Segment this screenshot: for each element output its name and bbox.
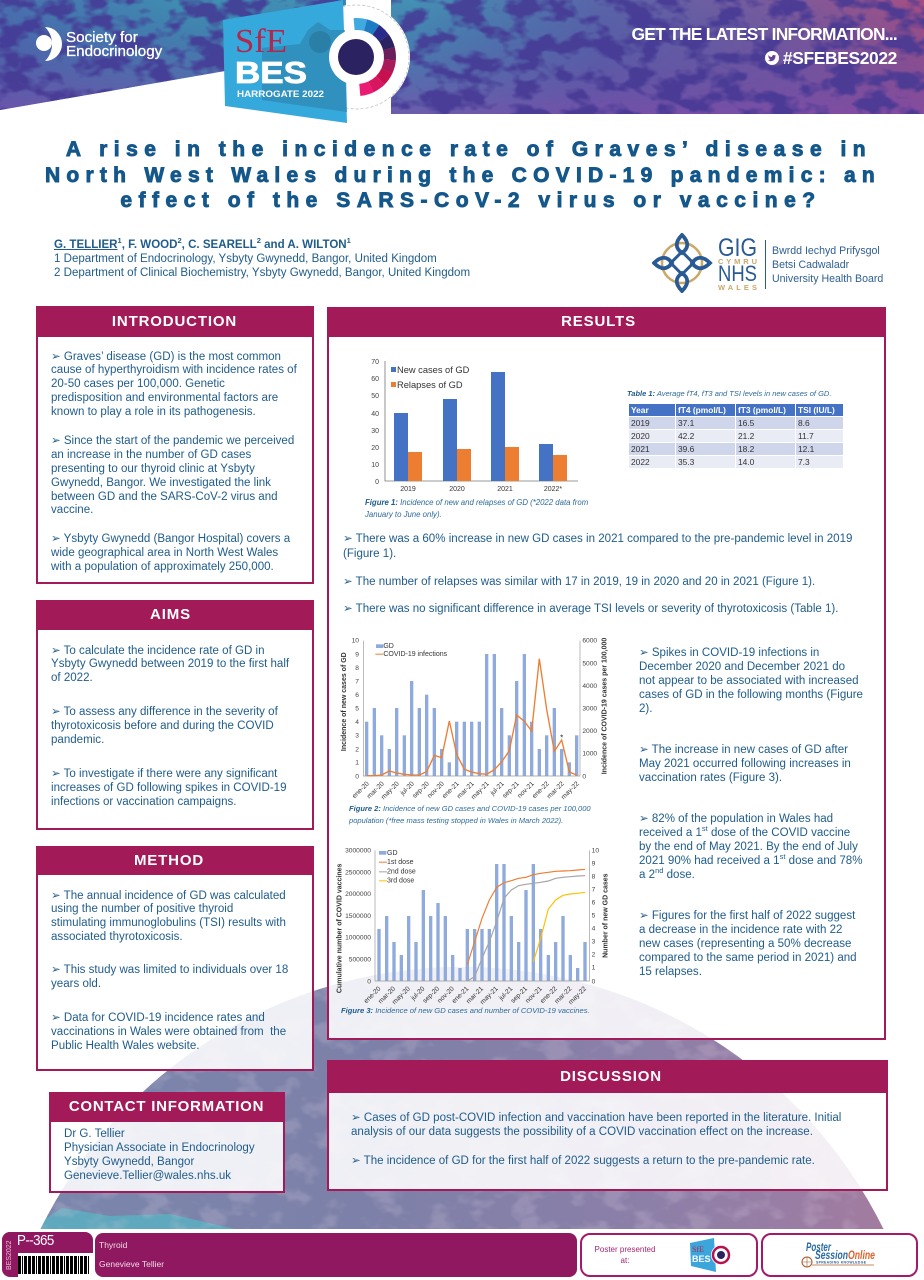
chart: figure 2 GD and COVID-19 infections: jul-20	[399, 780, 416, 798]
text: introduction bullets: presenting to our thyroid clinic at Ysbyty	[51, 463, 255, 475]
footer: topic and author: Thyroid	[99, 1240, 127, 1250]
table 1: 35.3	[678, 457, 694, 467]
text: aim 1: ➢ To calculate the incidence rate of GD in	[51, 642, 265, 656]
heading: contact information	[48, 1092, 284, 1122]
title: A rise in the incidence rate of Graves’ disease in	[66, 138, 872, 161]
text: results commentary on figures: 2021 90% had received a 1st dose and 78%	[639, 852, 862, 867]
logo: GIG Cymru NHS Wales, Betsi Cadwaladr: CYMRU	[718, 257, 757, 266]
chart: figure 2 GD and COVID-19 infections: 2000	[582, 728, 597, 735]
footer: Poster Session Online logo: Poster	[806, 1240, 832, 1254]
text: method 2	[51, 962, 288, 990]
table 1	[629, 404, 843, 468]
text: discussion bullets: analysis of our data suggests the possibility of a COVID vaccination effect on the increase.	[351, 1126, 813, 1138]
text: aim 3: infections or vaccination campaigns.	[51, 796, 236, 808]
text: introduction bullets: cause of hyperthyroidism with incidence rates of	[51, 364, 297, 376]
chart: figure 2 GD and COVID-19 infections: mar-21	[456, 780, 476, 800]
text: results findings: ➢ There was a 60% increase in new GD cases in 2021 compared to the pre-pandemic level in 2019	[343, 531, 852, 545]
text: introduction bullets: wide geographical area in North West Wales	[51, 547, 278, 559]
text: introduction bullets: ➢ Since the start of the pandemic we perceived	[51, 433, 294, 447]
text: results commentary on figures: December 2020 and December 2021 do	[639, 661, 845, 673]
panel: method	[36, 846, 314, 1071]
chart: figure 3 GD and vaccine doses: 10	[592, 847, 599, 854]
footer: topic and author	[95, 1233, 577, 1277]
text: aim 3: ➢ To investigate if there were any significant	[51, 766, 277, 780]
logo: GIG Cymru NHS Wales, Betsi Cadwaladr: NHS	[718, 261, 757, 286]
table 1: 14.0	[738, 457, 754, 467]
text: aim 1: Ysbyty Gwynedd between 2019 to the first half	[51, 658, 289, 670]
panel: aims	[36, 600, 314, 830]
text: introduction bullets: between GD and the SARS-CoV-2 virus and	[51, 491, 278, 503]
text: results findings	[343, 531, 852, 615]
chart: figure 3 GD and vaccine doses: 3000000	[345, 847, 371, 854]
chart: figure 2 GD and COVID-19 infections: 10	[352, 638, 359, 645]
chart: figure 3 GD and vaccine doses: 1500000	[345, 913, 371, 920]
text: introduction bullets: an increase in the number of GD cases	[51, 449, 251, 461]
text: method 2: ➢ This study was limited to individuals over 18	[51, 962, 288, 976]
chart: figure 3 GD and vaccine doses: mar-20	[377, 985, 397, 1005]
table 1: 2021	[631, 444, 650, 454]
logo: GIG Cymru NHS Wales, Betsi Cadwaladr: University Health Board	[772, 273, 883, 285]
chart: figure 3 GD and vaccine doses: 1000000	[345, 935, 371, 942]
table 1: 37.1	[678, 418, 694, 428]
text: aim 2: pandemic.	[51, 734, 104, 746]
table 1: 12.1	[798, 444, 814, 454]
chart: figure 3 GD and vaccine doses: 5	[592, 912, 596, 919]
chart: figure 1 bar chart: 50	[371, 393, 379, 400]
footer: poster number and barcode: P--365	[17, 1233, 54, 1249]
table 1: 8.6	[798, 418, 810, 428]
caption: figure 2	[348, 804, 591, 824]
caption: figure 1	[365, 498, 588, 518]
table 1: 39.6	[678, 444, 694, 454]
heading: results: RESULTS	[561, 312, 636, 330]
text: introduction bullets	[51, 348, 297, 573]
chart: figure 3 GD and vaccine doses: sep-20	[422, 985, 441, 1005]
text: introduction bullets: with a population of approximately 250,000.	[51, 561, 274, 573]
authors and affiliations: G. TELLIER1, F. WOOD2, C. SEARELL2 and A. WILTON1	[54, 236, 351, 251]
text: contact details: Physician Associate in Endocrinology	[64, 1142, 255, 1154]
logo: GIG Cymru NHS Wales, Betsi Cadwaladr	[652, 233, 883, 293]
chart: figure 1 bar chart: 10	[371, 462, 379, 469]
chart: figure 2 GD and COVID-19 infections: ene-21	[441, 780, 461, 800]
title: North West Wales during the COVID-19 pandemic: an	[45, 164, 881, 187]
text: aim 3: increases of GD following spikes in COVID-19	[51, 782, 287, 794]
table 1: 7.3	[798, 457, 810, 467]
text: results commentary on figures: ➢ The increase in new cases of GD after	[639, 742, 848, 756]
chart: figure 3 GD and vaccine doses: 2	[592, 951, 596, 958]
text: method 3: Public Health Wales website.	[51, 1040, 199, 1052]
header call to action	[632, 24, 897, 68]
table 1: TSI (IU/L)	[798, 405, 835, 415]
text: method 2: years old.	[51, 978, 101, 990]
heading: results	[326, 306, 886, 336]
authors and affiliations	[54, 236, 470, 279]
chart: figure 3 GD and vaccine doses: nov-20	[436, 985, 456, 1005]
chart: figure 2 GD and COVID-19 infections: 1	[355, 760, 359, 767]
text: method 3	[51, 1010, 286, 1052]
chart: figure 2 GD and COVID-19 infections: GD	[383, 643, 394, 650]
chart: figure 2 GD and COVID-19 infections: ene-22	[531, 780, 551, 800]
heading: introduction	[36, 306, 314, 336]
footer: poster presented at	[580, 1233, 758, 1277]
chart: figure 3 GD and vaccine doses: 8	[592, 873, 596, 880]
footer: topic and author: Genevieve Tellier	[99, 1259, 164, 1269]
text: aim 1	[51, 642, 290, 684]
caption: figure 1: January to June only).	[365, 510, 442, 518]
logo: Society for Endocrinology: Society for	[66, 29, 138, 46]
chart: figure 3 GD and vaccine doses: 3	[592, 938, 596, 945]
chart: figure 3 GD and vaccine doses: 9	[592, 860, 596, 867]
footer: Poster Session Online logo	[761, 1233, 918, 1277]
text: results commentary on figures: by the end of May 2021. By the end of July	[639, 841, 858, 853]
heading: aims	[36, 600, 314, 630]
heading: method: METHOD	[134, 852, 204, 868]
chart: figure 2 GD and COVID-19 infections: Incidence of COVID-19 cases per 100,000	[601, 638, 608, 774]
chart: figure 2 GD and COVID-19 infections: 7	[355, 678, 359, 685]
chart: figure 1 bar chart: 30	[371, 428, 379, 435]
chart: figure 2 GD and COVID-19 infections: mar-22	[546, 780, 566, 800]
chart: figure 3 GD and vaccine doses: ene-20	[363, 985, 383, 1005]
authors and affiliations: 2 Department of Clinical Biochemistry, Ysbyty Gwynedd, Bangor, United Kingdom	[54, 267, 470, 279]
text: discussion bullets	[351, 1110, 841, 1167]
footer: Poster Session Online logo: Session	[815, 1248, 848, 1262]
text: results commentary on figures: ➢ 82% of the population in Wales had	[639, 811, 833, 825]
chart: figure 3 GD and vaccine doses: ene-21	[451, 985, 471, 1005]
table 1: Year	[631, 405, 649, 415]
text: introduction bullets: known to play a role in its pathogenesis.	[51, 406, 256, 418]
chart: figure 3 GD and vaccine doses: GD	[387, 850, 398, 857]
text: aim 3	[51, 766, 287, 808]
chart: figure 3 GD and vaccine doses: mar-22	[554, 985, 574, 1005]
chart: figure 3 GD and vaccine doses: ene-22	[539, 985, 559, 1005]
table 1: 2020	[631, 431, 650, 441]
chart: figure 2 GD and COVID-19 infections: 8	[355, 665, 359, 672]
text: method 1: ➢ The annual incidence of GD was calculated	[51, 888, 286, 902]
panel: discussion	[327, 1060, 888, 1191]
text: introduction bullets: ➢ Ysbyty Gwynedd (Bangor Hospital) covers a	[51, 531, 290, 545]
title: effect of the SARS-CoV-2 virus or vaccine?	[120, 189, 822, 212]
logo: Society for Endocrinology	[36, 27, 162, 61]
text: contact details	[64, 1128, 255, 1182]
chart: figure 2 GD and COVID-19 infections: Incidence of new cases of GD	[341, 652, 348, 751]
footer: poster number and barcode	[2, 1232, 93, 1277]
text: aim 2: ➢ To assess any difference in the severity of	[51, 704, 278, 718]
chart: figure 3 GD and vaccine doses: 2500000	[345, 869, 371, 876]
chart: figure 2 GD and COVID-19 infections: *	[560, 734, 563, 743]
chart: figure 1 bar chart: 60	[371, 376, 379, 383]
header call to action: GET THE LATEST INFORMATION...	[632, 24, 897, 44]
chart: figure 2 GD and COVID-19 infections: jul-21	[489, 780, 506, 798]
chart: figure 2 GD and COVID-19 infections: 5	[355, 706, 359, 713]
text: method 1: associated thyrotoxicosis.	[51, 931, 183, 943]
chart: figure 1 bar chart: New cases of GD	[397, 365, 470, 375]
chart: figure 1 bar chart: 2021	[497, 486, 513, 493]
header call to action: #SFEBES2022	[783, 48, 897, 68]
text: discussion bullets: ➢ Cases of GD post-COVID infection and vaccination have been reported in the literature. Initial	[351, 1110, 841, 1124]
text: aim 1: of 2022.	[51, 672, 93, 684]
text: results commentary on figures: vaccination rates (Figure 3).	[639, 772, 782, 784]
text: results commentary on figures	[639, 645, 863, 978]
text: results commentary on figures: ➢ Spikes in COVID-19 infections in	[639, 645, 819, 659]
text: aim 2	[51, 704, 278, 746]
text: method 3: ➢ Data for COVID-19 incidence rates and	[51, 1010, 265, 1024]
chart: figure 2 GD and COVID-19 infections: 9	[355, 651, 359, 658]
logo: GIG Cymru NHS Wales, Betsi Cadwaladr: Bwrdd Iechyd Prifysgol	[772, 245, 880, 257]
caption: figure 2: population (*free mass testing stopped in Wales in March 2022).	[349, 816, 563, 824]
chart: figure 2 GD and COVID-19 infections: 3	[355, 733, 359, 740]
chart: figure 3 GD and vaccine doses: 4	[592, 925, 596, 932]
chart: figure 1 bar chart: 2022*	[544, 486, 562, 493]
authors and affiliations: 1 Department of Endocrinology, Ysbyty Gwynedd, Bangor, United Kingdom	[54, 253, 437, 265]
chart: figure 3 GD and vaccine doses: mar-21	[465, 985, 485, 1005]
logo: SfE BES Harrogate 2022: BES	[235, 55, 307, 90]
text: introduction bullets: 20-50 cases per 100,000. Genetic	[51, 378, 225, 390]
chart: figure 2 GD and COVID-19 infections: 1000	[582, 751, 597, 758]
chart: figure 3 GD and vaccine doses: Cumulative number of COVID vaccines	[337, 863, 344, 993]
chart: figure 3 GD and vaccine doses: 0	[367, 978, 371, 985]
table 1: fT3 (pmol/L)	[738, 405, 786, 415]
chart: figure 2 GD and COVID-19 infections: mar-20	[366, 780, 386, 800]
chart: figure 3 GD and vaccine doses: Number of new GD cases	[603, 873, 610, 958]
caption: figure 2: Figure 2: Incidence of new GD cases and COVID-19 cases per 100,000	[349, 804, 591, 813]
panel: contact information	[49, 1092, 285, 1193]
chart: figure 2 GD and COVID-19 infections	[340, 638, 608, 800]
table 1: 18.2	[738, 444, 754, 454]
footer: poster presented at: SfE	[692, 1245, 704, 1254]
logo: SfE BES Harrogate 2022	[223, 0, 410, 123]
footer: poster number and barcode: BES2022	[6, 1240, 13, 1270]
logo: SfE BES Harrogate 2022: HARROGATE 2022	[237, 89, 324, 100]
panel: results	[327, 307, 886, 1040]
text: method 1: using the number of positive thyroid	[51, 903, 233, 915]
text: introduction bullets: predisposition and environmental factors are	[51, 392, 278, 404]
chart: figure 3 GD and vaccine doses: 2000000	[345, 891, 371, 898]
logo: GIG Cymru NHS Wales, Betsi Cadwaladr: WALES	[718, 283, 757, 292]
footer: Poster Session Online logo: SPREADING KNOWLEDGE	[816, 1260, 867, 1264]
chart: figure 3 GD and vaccine doses: 1st dose	[387, 859, 414, 866]
logo: Society for Endocrinology: Endocrinology	[66, 42, 162, 60]
chart: figure 2 GD and COVID-19 infections: nov-20	[426, 780, 446, 800]
chart: figure 3 GD and vaccine doses: jul-21	[497, 985, 515, 1003]
logo: SfE BES Harrogate 2022: SfE	[235, 23, 287, 60]
text: results commentary on figures: received a 1st dose of the COVID vaccine	[639, 824, 850, 839]
text: results commentary on figures: ➢ Figures for the first half of 2022 suggest	[639, 908, 855, 922]
logo: GIG Cymru NHS Wales, Betsi Cadwaladr: Betsi Cadwaladr	[772, 259, 850, 271]
text: introduction bullets: vaccine.	[51, 504, 93, 516]
chart: figure 3 GD and vaccine doses: 7	[592, 886, 596, 893]
text: contact details: Genevieve.Tellier@wales.nhs.uk	[64, 1170, 231, 1182]
chart: figure 2 GD and COVID-19 infections: 4	[355, 719, 359, 726]
chart: figure 3 GD and vaccine doses: 2nd dose	[387, 869, 416, 876]
text: method 1	[51, 888, 286, 943]
chart: figure 1 bar chart: 0	[375, 479, 379, 486]
logo: GIG Cymru NHS Wales, Betsi Cadwaladr: GIG	[718, 234, 757, 262]
text: results commentary on figures: new cases (representing a 50% decrease	[639, 938, 851, 950]
chart: figure 2 GD and COVID-19 infections: COVID-19 infections	[383, 651, 448, 658]
text: contact details: Ysbyty Gwynedd, Bangor	[64, 1156, 194, 1168]
chart: figure 3 GD and vaccine doses: 1	[592, 964, 596, 971]
chart: figure 2 GD and COVID-19 infections: sep-21	[501, 780, 521, 800]
table 1: 2019	[631, 418, 650, 428]
chart: figure 1 bar chart: 2020	[449, 486, 465, 493]
heading: discussion: DISCUSSION	[560, 1068, 662, 1084]
caption: table 1: Table 1: Average fT4, fT3 and TSI levels in new cases of GD.	[627, 389, 831, 398]
chart: figure 2 GD and COVID-19 infections: 4000	[582, 683, 597, 690]
footer: poster presented at: at:	[621, 1256, 629, 1265]
heading: contact information: CONTACT INFORMATION	[69, 1098, 264, 1114]
chart: figure 1 bar chart: 2019	[400, 486, 416, 493]
chart: figure 3 GD and vaccine doses	[336, 847, 610, 1005]
text: contact details: Dr G. Tellier	[64, 1128, 125, 1140]
text: results commentary on figures: a 2nd dose.	[639, 866, 695, 881]
title	[45, 138, 881, 212]
chart: figure 2 GD and COVID-19 infections: 2	[355, 746, 359, 753]
chart: figure 2 GD and COVID-19 infections: 3000	[582, 705, 597, 712]
footer: Poster Session Online logo: Online	[848, 1248, 875, 1262]
text: results commentary on figures: 15 relapses.	[639, 966, 702, 978]
heading: introduction: INTRODUCTION	[112, 312, 237, 330]
text: introduction bullets: ➢ Graves’ disease (GD) is the most common	[51, 348, 281, 362]
text: results commentary on figures: compared to the same period in 2021) and	[639, 952, 857, 964]
caption: figure 3: Figure 3: Incidence of new GD cases and number of COVID-19 vaccines.	[341, 1006, 590, 1015]
text: results commentary on figures: a decrease in the incidence rate with 22	[639, 924, 842, 936]
text: method 3: vaccinations in Wales were obtained from the	[51, 1026, 286, 1038]
footer: poster presented at: Poster presented	[595, 1245, 655, 1254]
text: results commentary on figures: 2).	[639, 703, 652, 715]
chart: figure 1 bar chart: 70	[371, 359, 379, 366]
chart: figure 1 bar chart: 40	[371, 411, 379, 418]
text: results findings: (Figure 1).	[343, 548, 396, 560]
chart: figure 2 GD and COVID-19 infections: 0	[355, 773, 359, 780]
chart: figure 1 bar chart: Relapses of GD	[397, 380, 463, 390]
table 1: 11.7	[798, 431, 814, 441]
chart: figure 2 GD and COVID-19 infections: ene-20	[351, 780, 371, 800]
chart: figure 3 GD and vaccine doses: jul-20	[409, 985, 427, 1003]
chart: figure 2 GD and COVID-19 infections: 6	[355, 692, 359, 699]
text: introduction bullets: Gwynedd, Bangor. We investigated the link	[51, 477, 271, 489]
text: results commentary on figures: cases of GD in the following months (Figure	[639, 689, 863, 701]
table 1: 16.5	[738, 418, 754, 428]
heading: aims: AIMS	[150, 606, 191, 622]
heading: discussion	[326, 1060, 888, 1092]
text: method 1: stimulating immunoglobulins (TSI) results with	[51, 917, 286, 929]
text: aim 2: thyrotoxicosis before and during the COVID	[51, 720, 274, 732]
table 1: fT4 (pmol/L)	[678, 405, 726, 415]
text: discussion bullets: ➢ The incidence of GD for the first half of 2022 suggests a return to the pre-pandemic rate.	[351, 1153, 815, 1167]
table 1: 42.2	[678, 431, 694, 441]
chart: figure 3 GD and vaccine doses: 0	[592, 978, 596, 985]
panel: introduction	[36, 306, 314, 584]
chart: figure 2 GD and COVID-19 infections: sep-20	[411, 780, 431, 800]
chart: figure 3 GD and vaccine doses: nov-21	[524, 985, 544, 1005]
chart: figure 3 GD and vaccine doses: 6	[592, 899, 596, 906]
chart: figure 3 GD and vaccine doses: sep-21	[510, 985, 529, 1005]
chart: figure 3 GD and vaccine doses: 500000	[349, 957, 371, 964]
heading: method	[36, 846, 314, 874]
footer: poster presented at: BES	[692, 1254, 711, 1264]
chart: figure 2 GD and COVID-19 infections: 6000	[582, 638, 597, 645]
text: results commentary on figures: May 2021 occurred following increases in	[639, 758, 851, 770]
chart: figure 2 GD and COVID-19 infections: 5000	[582, 660, 597, 667]
table 1: 21.2	[738, 431, 754, 441]
text: results commentary on figures: not appear to be associated with increased	[639, 675, 859, 687]
chart: figure 1 bar chart	[371, 359, 578, 493]
text: results findings: ➢ The number of relapses was similar with 17 in 2019, 19 in 2020 and 20 in 2021 (Figure 1).	[343, 574, 815, 588]
chart: figure 2 GD and COVID-19 infections: nov-21	[516, 780, 536, 800]
chart: figure 1 bar chart: 20	[371, 445, 379, 452]
text: results findings: ➢ There was no significant difference in average TSI levels or severity of thyrotoxicosis (Table 1).	[343, 601, 838, 615]
chart: figure 3 GD and vaccine doses: 3rd dose	[387, 878, 414, 885]
chart: figure 2 GD and COVID-19 infections: 0	[582, 773, 586, 780]
table 1: 2022	[631, 457, 650, 467]
caption: figure 1: Figure 1: Incidence of new and relapses of GD (*2022 data from	[365, 498, 588, 507]
